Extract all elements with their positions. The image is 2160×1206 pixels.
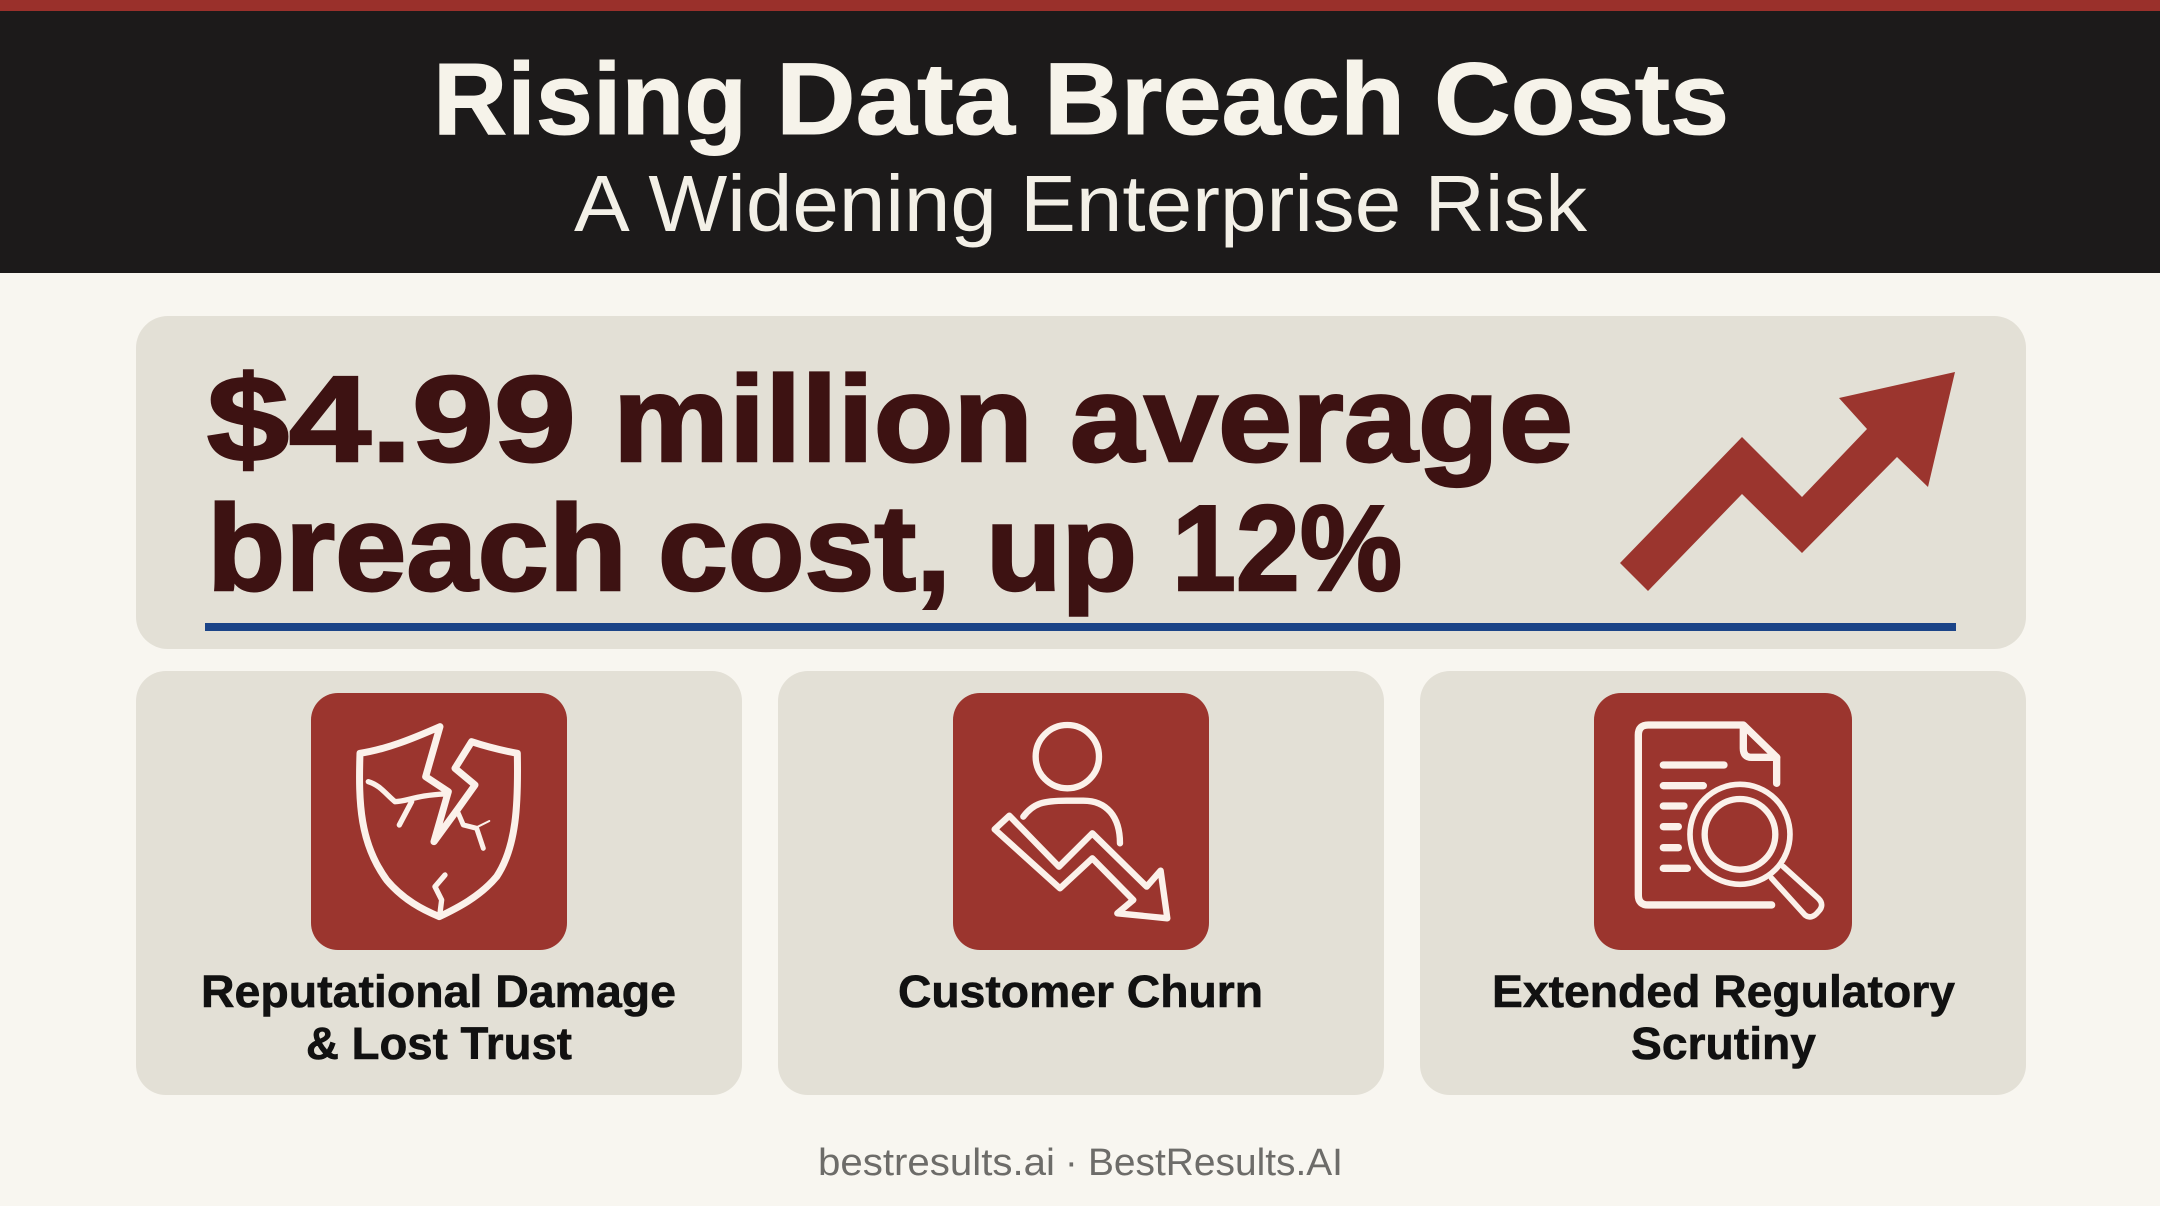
icon: document with magnifier [1594, 693, 1852, 950]
icon: customer with falling arrow [953, 693, 1209, 950]
label: reputational damage: Reputational Damage [201, 966, 676, 1017]
header band [0, 0, 2160, 273]
blue underline [205, 623, 1956, 631]
footer source line [818, 1142, 1343, 1184]
headline statistic text: average [1070, 351, 1573, 487]
label: reputational damage [201, 966, 676, 1069]
title: Data [776, 42, 1016, 156]
footer source line: · [1065, 1142, 1078, 1184]
label: regulatory scrutiny: Extended Regulatory [1492, 966, 1955, 1017]
title: Rising [433, 42, 747, 156]
label: reputational damage: & Lost Trust [306, 1018, 572, 1069]
panel: regulatory scrutiny [1420, 671, 2026, 1095]
title: Breach [1044, 42, 1405, 156]
subtitle: A Widening Enterprise Risk [574, 159, 1588, 248]
panel: reputational damage [136, 671, 742, 1095]
headline statistic text [207, 351, 1573, 616]
label: regulatory scrutiny: Scrutiny [1631, 1018, 1816, 1069]
panel: headline statistic [136, 316, 2026, 649]
title: Costs [1434, 42, 1729, 156]
label: regulatory scrutiny [1492, 966, 1955, 1069]
label: customer churn: Customer Churn [898, 966, 1263, 1017]
title [433, 42, 1729, 156]
icon: rising arrow [1620, 372, 1955, 591]
headline statistic text: 12% [1172, 480, 1402, 616]
footer source line: bestresults.ai [818, 1142, 1055, 1184]
headline statistic text: $4.99 [207, 351, 576, 487]
headline statistic text: million [613, 351, 1033, 487]
panel: customer churn [778, 671, 1384, 1095]
headline statistic text: up [986, 480, 1137, 616]
headline statistic text: cost, [658, 480, 951, 616]
icon: broken shield [311, 693, 567, 950]
headline statistic text: breach [207, 480, 627, 616]
footer source line: BestResults.AI [1088, 1142, 1343, 1184]
